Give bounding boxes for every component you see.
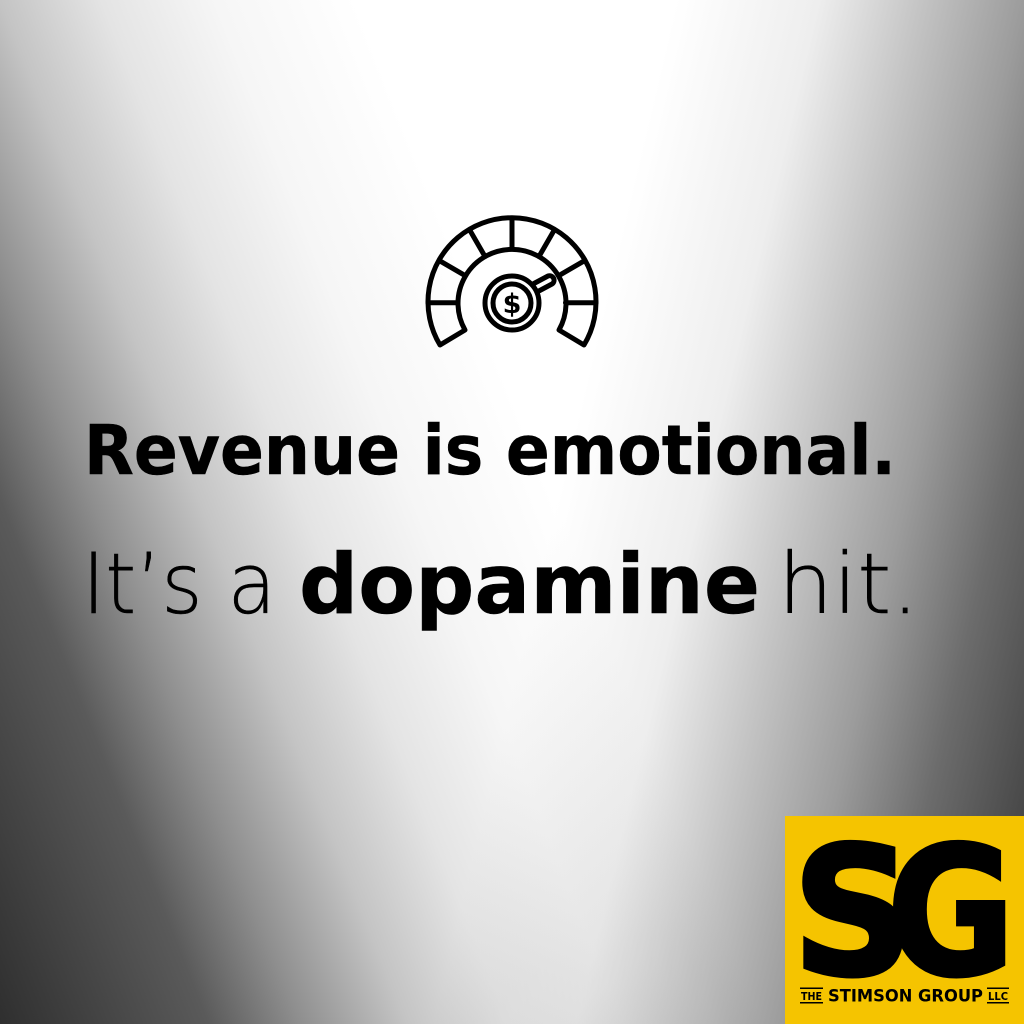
logo monogram: SG: S — [792, 809, 914, 1016]
subheadline: It's a dopamine hit.: hit. — [778, 535, 919, 633]
logo wordmark: LLC — [988, 990, 1008, 1003]
subheadline: It's a dopamine hit.: dopamine — [299, 536, 760, 633]
logo: The Stimson Group LLC — [785, 809, 1024, 1024]
icon: dollar sign: $ — [503, 289, 521, 320]
logo wordmark: THE — [801, 990, 822, 1003]
subheadline: It's a dopamine hit. — [82, 535, 919, 633]
subheadline: It's a dopamine hit.: It’s a — [82, 535, 276, 633]
logo monogram: SG — [792, 809, 1015, 1016]
headline: Revenue is emotional.: Revenue is emotional. — [84, 411, 896, 491]
logo wordmark: STIMSON GROUP — [828, 986, 983, 1006]
icon: revenue speedometer gauge — [428, 218, 596, 345]
